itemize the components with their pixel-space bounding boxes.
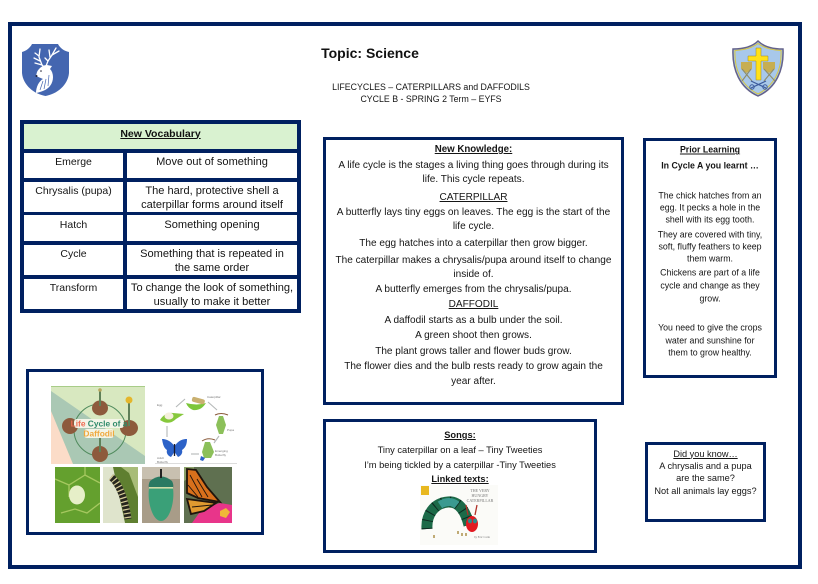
- vocabulary text: Chrysalis (pupa): [35, 185, 112, 197]
- image: the very hungry caterpillar book cover: CATERPILLAR: [467, 498, 494, 503]
- row: emerge definition: [127, 153, 297, 178]
- vocabulary text: Cycle: [60, 248, 87, 260]
- prior learning text: water and sunshine for: [666, 336, 754, 346]
- prior learning text: egg. It pecks a hole in the: [660, 202, 760, 212]
- panel: prior learning: [643, 138, 777, 378]
- prior learning text: They are covered with tiny,: [658, 230, 762, 240]
- panel: life cycle pictures: [26, 369, 264, 535]
- image: egg on a leaf: [55, 467, 100, 523]
- row: transform definition: [127, 279, 297, 309]
- songs list: Tiny caterpillar on a leaf – Tiny Tweeties: [378, 445, 542, 455]
- vocabulary text: Something opening: [164, 219, 260, 231]
- prior learning text: [658, 190, 762, 358]
- row: chrysalis definition: [127, 182, 297, 212]
- row: hatch definition: [127, 215, 297, 241]
- new knowledge heading: New Knowledge:: [435, 144, 512, 155]
- did you know text: Not all animals lay eggs?: [654, 486, 757, 496]
- row: transform term: [24, 279, 123, 309]
- row: chrysalis term: [24, 182, 123, 212]
- songs heading: Songs:: [444, 430, 476, 440]
- new knowledge text: life. This cycle repeats.: [422, 174, 524, 185]
- did you know text: A chrysalis and a pupa: [659, 460, 752, 470]
- prior learning text: You need to give the crops: [658, 322, 762, 332]
- vocabulary text: Transform: [50, 282, 97, 294]
- image: butterfly life cycle diagram: Adult: [157, 456, 164, 460]
- subtitle: [332, 82, 530, 104]
- image: the very hungry caterpillar book cover: HUNGRY: [472, 493, 489, 498]
- image: life cycle of a daffodil: Life Cycle of a: [71, 418, 128, 428]
- new knowledge text: The caterpillar makes a chrysalis/pupa around itself to change: [336, 255, 611, 266]
- prior learning intro: In Cycle A you learnt …: [661, 160, 759, 170]
- image: the very hungry caterpillar book cover: THE VERY: [470, 488, 490, 493]
- new knowledge text: [336, 160, 611, 387]
- new knowledge text: The flower dies and the bulb rests ready to grow again the: [344, 361, 603, 372]
- did you know text: are the same?: [676, 473, 735, 483]
- vocabulary text: Something that is repeated in: [140, 248, 284, 260]
- image: the very hungry caterpillar book cover: by Eric Carle: [474, 535, 491, 539]
- vocabulary heading: [24, 124, 297, 149]
- vocabulary text: usually to make it better: [154, 296, 270, 308]
- new knowledge text: The plant grows taller and flower buds grow.: [375, 346, 572, 357]
- prior learning text: The chick hatches from an: [658, 190, 762, 200]
- image: butterfly life cycle diagram: Emerging: [215, 449, 228, 453]
- image: life cycle of a daffodil: Daffodil: [83, 428, 115, 438]
- image: caterpillar on a stem: [103, 467, 138, 523]
- image: butterfly life cycle diagram: Butterfly: [215, 453, 227, 457]
- vocabulary text: To change the look of something,: [131, 282, 293, 294]
- prior learning text: soft, fluffy feathers to keep: [658, 242, 762, 252]
- new knowledge text: A daffodil starts as a bulb under the soil.: [384, 315, 562, 326]
- vocabulary text: caterpillar forms around itself: [141, 199, 283, 211]
- image: the very hungry caterpillar book cover: [421, 486, 494, 539]
- prior learning heading: Prior Learning: [680, 144, 740, 154]
- image: butterfly life cycle diagram: Caterpillar: [207, 395, 221, 399]
- image: butterfly life cycle diagram: [155, 395, 237, 464]
- new knowledge text: inside of.: [453, 269, 494, 280]
- prior learning text: grow.: [699, 294, 721, 304]
- vocabulary heading text: New Vocabulary: [120, 128, 201, 140]
- new knowledge text: A butterfly lays tiny eggs on leaves. The egg is the start of the: [337, 207, 610, 218]
- linked texts heading: Linked texts:: [431, 474, 489, 484]
- prior learning text: Chickens are part of a life: [660, 268, 760, 278]
- vocabulary text: Move out of something: [156, 156, 268, 168]
- did you know heading: Did you know…: [673, 448, 738, 458]
- did you know text: [654, 460, 757, 496]
- prior learning text: them warm.: [687, 254, 733, 264]
- title: Topic: Science: [321, 45, 419, 61]
- subtitle: CYCLE B - SPRING 2 Term – EYFS: [360, 94, 502, 104]
- new knowledge text: CATERPILLAR: [440, 192, 507, 203]
- vocabulary text: [35, 156, 293, 308]
- panel: songs and linked texts: [323, 419, 597, 553]
- subtitle: LIFECYCLES – CATERPILLARS and DAFFODILS: [332, 82, 530, 92]
- icon: cross and wheat crest: [732, 40, 784, 97]
- prior learning text: them to grow healthy.: [668, 348, 752, 358]
- new knowledge text: A life cycle is the stages a living thing goes through during its: [338, 160, 609, 171]
- prior learning text: shell with its egg tooth.: [666, 214, 754, 224]
- image: butterfly life cycle diagram: Butterfly: [157, 460, 169, 464]
- image: butterfly life cycle diagram: Egg: [157, 403, 163, 407]
- songs list: I’m being tickled by a caterpillar -Tiny Tweeties: [364, 460, 556, 470]
- row: cycle definition: [127, 245, 297, 275]
- new knowledge text: DAFFODIL: [449, 299, 498, 310]
- icon: stag school crest: [22, 44, 69, 96]
- panel: did you know: [645, 442, 766, 522]
- new knowledge text: The egg hatches into a caterpillar then grow bigger.: [359, 238, 588, 249]
- songs list: [364, 445, 556, 470]
- row: cycle term: [24, 245, 123, 275]
- new knowledge text: year after.: [451, 376, 496, 387]
- vocabulary text: Hatch: [60, 219, 87, 231]
- row: emerge term: [24, 153, 123, 178]
- panel: new knowledge: [323, 137, 624, 405]
- vocabulary text: The hard, protective shell a: [145, 185, 279, 197]
- image: green chrysalis: [142, 467, 180, 523]
- row: hatch term: [24, 215, 123, 241]
- prior learning text: cycle and change as they: [660, 280, 760, 290]
- new knowledge text: A green shoot then grows.: [415, 330, 532, 341]
- image: monarch butterfly on flower: [184, 467, 232, 523]
- new knowledge text: life cycle.: [453, 221, 494, 232]
- new knowledge text: A butterfly emerges from the chrysalis/pupa.: [375, 284, 572, 295]
- image: life cycle of a daffodil: [51, 386, 145, 464]
- vocabulary text: Emerge: [55, 156, 92, 168]
- image: butterfly life cycle diagram: Pupa: [227, 428, 234, 432]
- vocabulary text: the same order: [175, 262, 249, 274]
- panel: new vocabulary table: [20, 120, 301, 313]
